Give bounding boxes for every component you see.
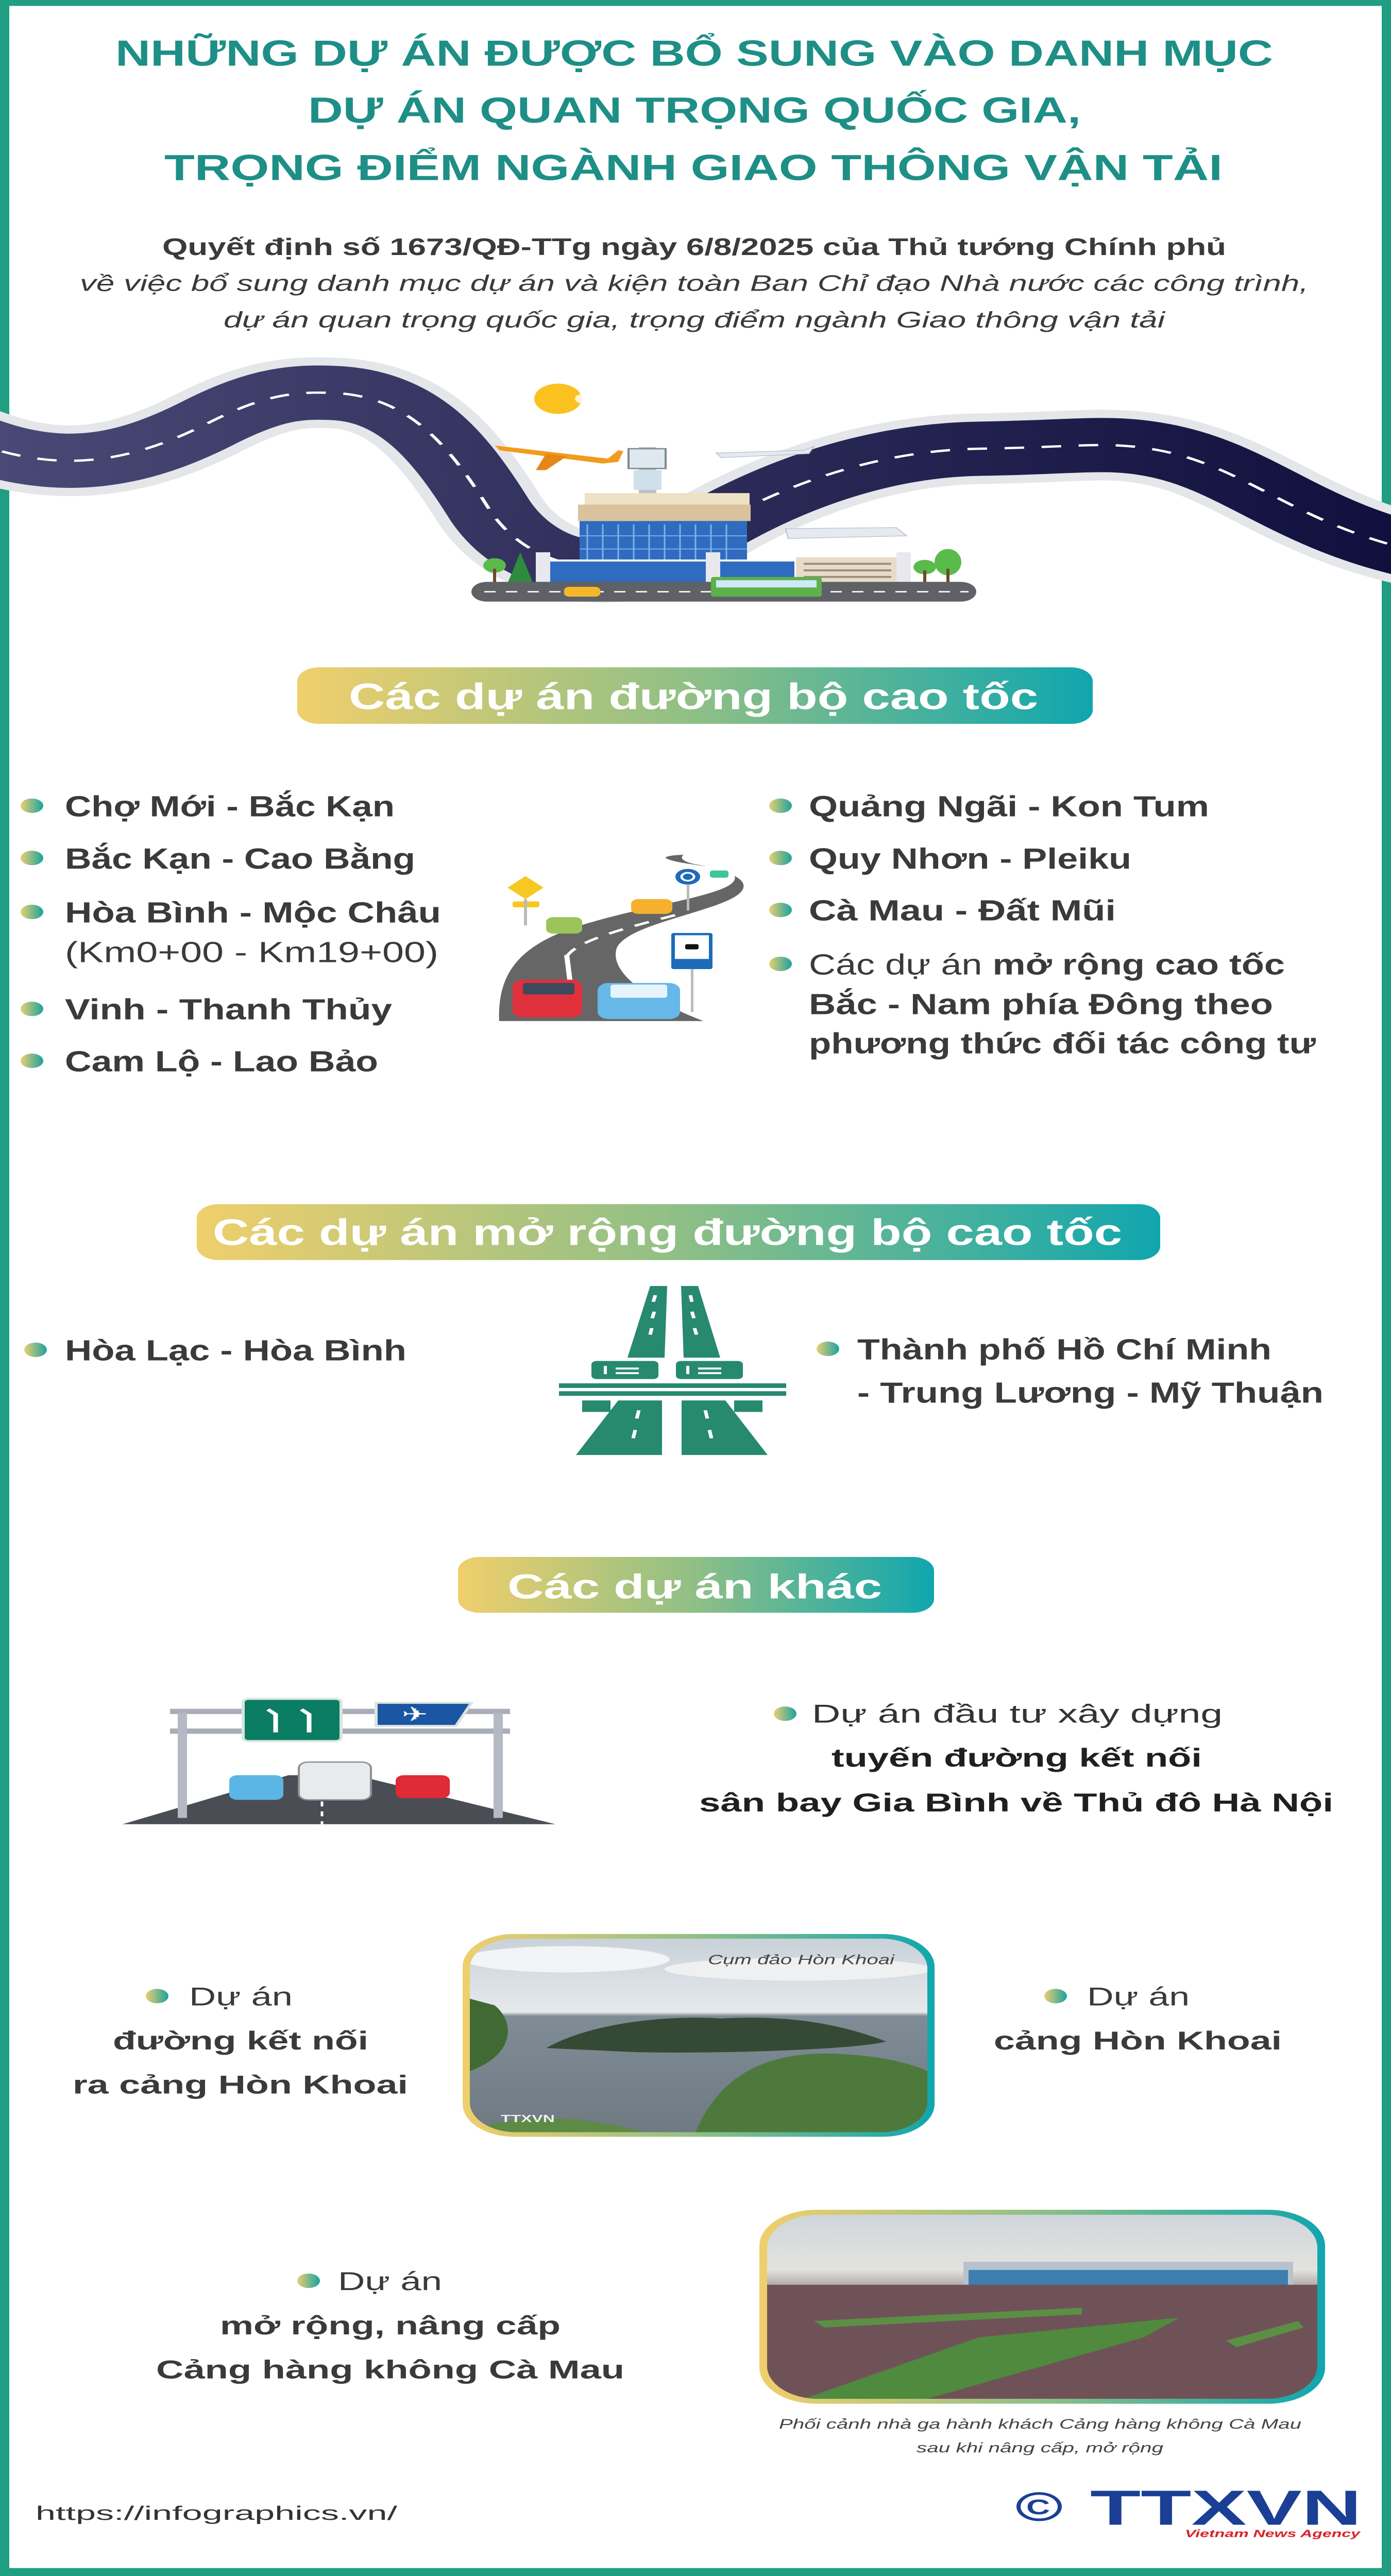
photo: Hòn Khoai islands: TTXVN (501, 2113, 555, 2124)
heading pill 1 (297, 667, 1093, 724)
list: highway projects right: Các dự án mở rộng cao tốc (809, 948, 1285, 980)
title: TRỌNG ĐIỂM NGÀNH GIAO THÔNG VẬN TẢI (164, 147, 1223, 188)
subtitle: Quyết định số 1673/QĐ-TTg ngày 6/8/2025 của Thủ tướng Chính phủ (162, 233, 1226, 260)
text: Cà Mau airport upgrade: Dự án (338, 2267, 442, 2296)
icon: highway gantry with signs (123, 1699, 555, 1824)
text: Gia Bình airport road: tuyến đường kết nối (832, 1743, 1202, 1772)
subtitle: về việc bổ sung danh mục dự án và kiện toàn Ban Chỉ đạo Nhà nước các công trình, (80, 271, 1309, 296)
illustration: winding road with airport (0, 384, 1391, 602)
photo: Cà Mau airport terminal (759, 2210, 1325, 2404)
list: highway projects right: Quy Nhơn - Pleiku (809, 842, 1131, 875)
photo caption (779, 2417, 1301, 2455)
icon: winding road with cars (497, 853, 745, 1022)
list: highway projects right: Cà Mau - Đất Mũi (809, 894, 1116, 927)
text: Cà Mau airport upgrade (156, 2267, 624, 2384)
list: highway projects left: Bắc Kạn - Cao Bằng (65, 842, 415, 875)
icon: orange plane (495, 446, 623, 470)
icon: white planes (716, 447, 907, 538)
heading pill 3: Các dự án khác (507, 1567, 882, 1606)
heading pill 3 (458, 1557, 934, 1613)
logo: TTXVN (1019, 2480, 1362, 2539)
text: Hòn Khoai port (994, 1982, 1282, 2055)
list: highway projects left: Vinh - Thanh Thủy (65, 993, 392, 1026)
heading pill 2 (197, 1204, 1160, 1260)
text: HCM - Trung Lương - Mỹ Thuận: Thành phố Hồ Chí Minh (857, 1333, 1271, 1366)
text: Gia Bình airport road: Dự án đầu tư xây dựng (812, 1700, 1223, 1728)
title (115, 33, 1273, 188)
heading pill 2: Các dự án mở rộng đường bộ cao tốc (213, 1212, 1122, 1253)
text: road to Hòn Khoai port: Dự án (189, 1982, 293, 2011)
subtitle: dự án quan trọng quốc gia, trọng điểm ngành Giao thông vận tải (224, 308, 1165, 332)
list: highway projects left: Chợ Mới - Bắc Kạn (65, 790, 395, 823)
icon: highway interchange (559, 1286, 786, 1455)
text: Cà Mau airport upgrade: Cảng hàng không Cà Mau (156, 2355, 624, 2384)
list: highway projects left: Cam Lộ - Lao Bảo (65, 1045, 378, 1078)
text: HCM - Trung Lương - Mỹ Thuận (817, 1333, 1324, 1409)
list: highway projects right: Quảng Ngãi - Kon Tum (809, 790, 1209, 823)
text: Hòn Khoai port: cảng Hòn Khoai (994, 2026, 1282, 2055)
list: highway projects right (769, 790, 1316, 1060)
heading pill 1: Các dự án đường bộ cao tốc (349, 676, 1038, 717)
logo: TTXVN: C (1026, 2496, 1050, 2519)
text: road to Hòn Khoai port: đường kết nối (113, 2026, 368, 2055)
text: Gia Bình airport road (699, 1700, 1333, 1817)
text: road to Hòn Khoai port: ra cảng Hòn Khoai (73, 2070, 408, 2099)
text: Hòa Lạc: Hòa Lạc - Hòa Bình (65, 1334, 406, 1367)
list: highway projects right: Bắc - Nam phía Đông theo (809, 988, 1273, 1021)
list: highway projects left: Hòa Bình - Mộc Châu (65, 896, 441, 929)
footer url: https://infographics.vn/ (36, 2502, 397, 2524)
photo: Hòn Khoai islands: Cụm đảo Hòn Khoai (708, 1953, 895, 1968)
subtitle (80, 233, 1309, 332)
photo: Hòn Khoai islands (463, 1934, 935, 2137)
icon: highway gantry with signs: ✈ (402, 1703, 428, 1725)
list: highway projects left: (Km0+00 - Km19+00) (65, 936, 438, 969)
icon: sun (534, 384, 582, 414)
logo: TTXVN: TTXVN (1090, 2480, 1362, 2535)
text: road to Hòn Khoai port (73, 1982, 408, 2099)
photo caption: Phối cảnh nhà ga hành khách Cảng hàng không Cà Mau (779, 2417, 1301, 2432)
text: Cà Mau airport upgrade: mở rộng, nâng cấp (220, 2311, 561, 2340)
text: Gia Bình airport road: sân bay Gia Bình về Thủ đô Hà Nội (699, 1788, 1333, 1817)
photo caption: sau khi nâng cấp, mở rộng (917, 2440, 1163, 2455)
title: DỰ ÁN QUAN TRỌNG QUỐC GIA, (308, 90, 1081, 130)
text: Hòn Khoai port: Dự án (1087, 1982, 1190, 2011)
logo: TTXVN: Vietnam News Agency (1185, 2528, 1361, 2539)
airport building (471, 447, 976, 602)
list: highway projects left (21, 790, 441, 1078)
